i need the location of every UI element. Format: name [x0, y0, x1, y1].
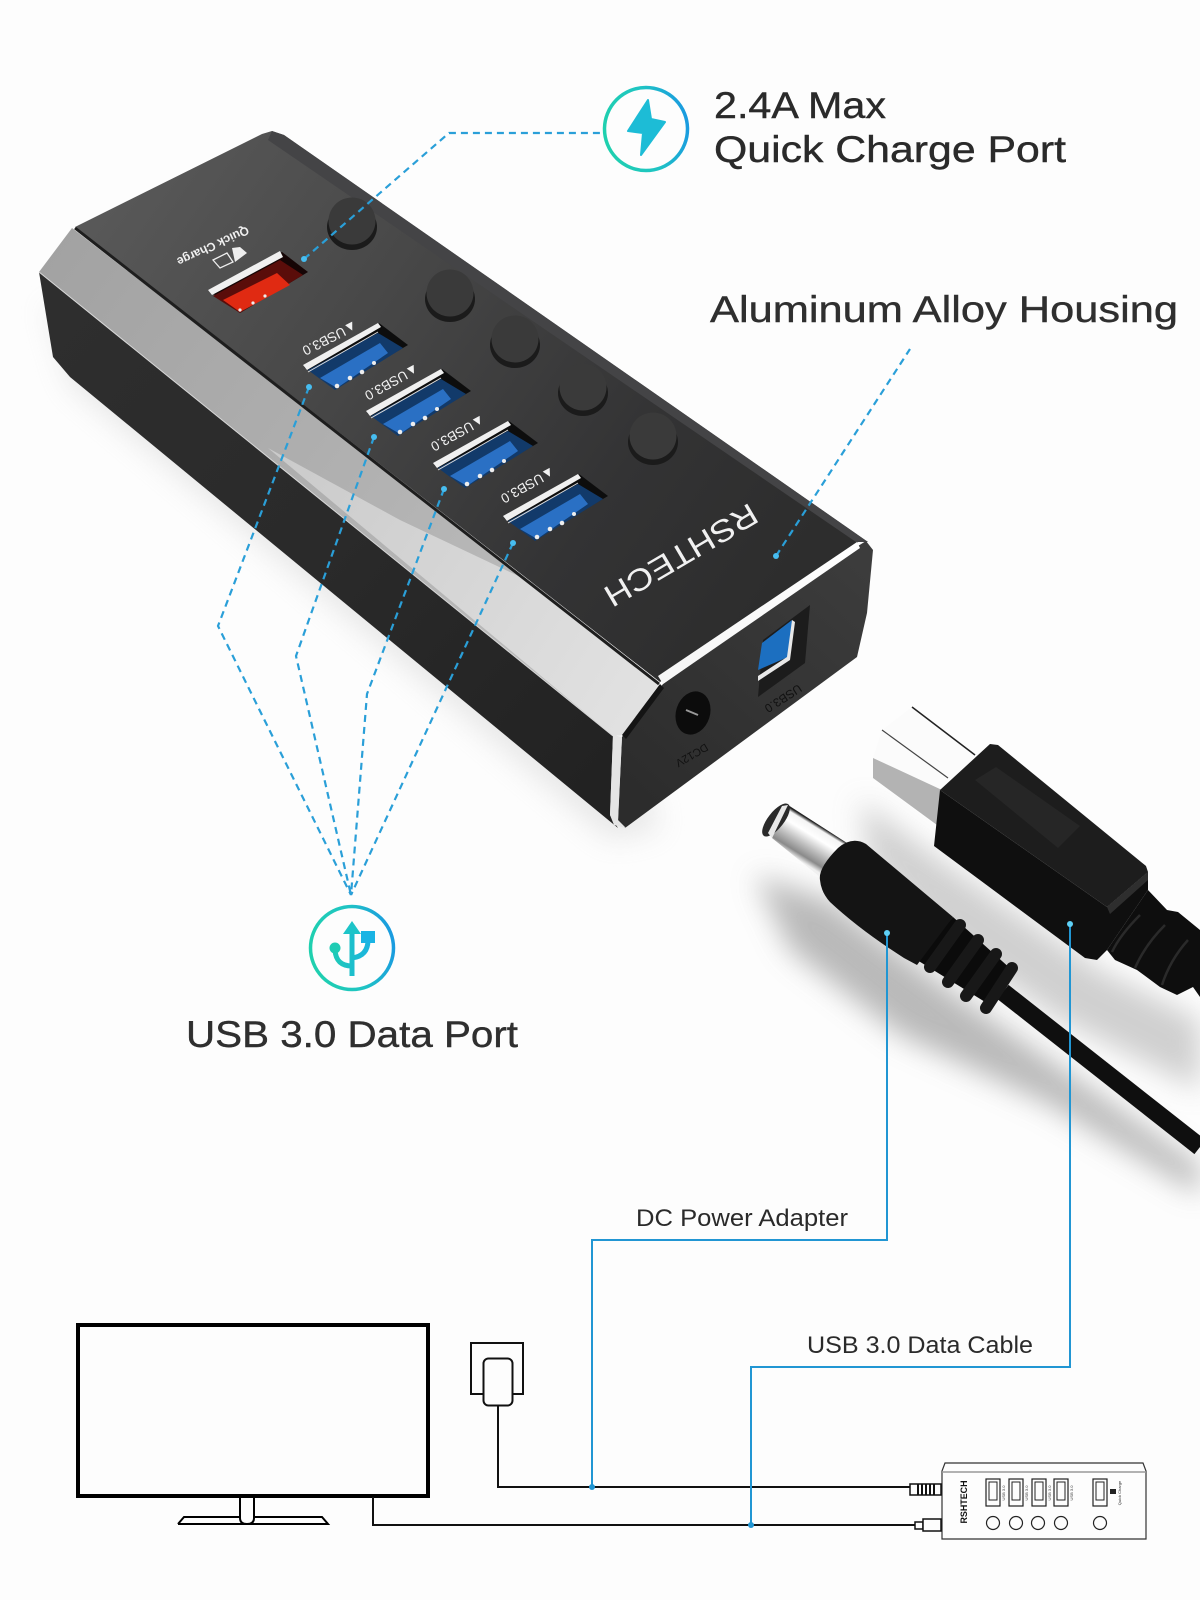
mini hub port labels — [1001, 1480, 1122, 1505]
power buttons — [327, 198, 678, 465]
USB 3.0 port 3 — [433, 421, 538, 488]
hub front face — [610, 541, 873, 828]
data wire from monitor to hub — [373, 1497, 916, 1525]
mini hub port labels: USB 3.0 — [1069, 1485, 1074, 1500]
quick charge dashed leader — [304, 133, 602, 259]
USB-B upstream port: USB3.0 — [762, 681, 804, 716]
DC power cable plug — [757, 799, 1200, 1147]
mini hub outline — [942, 1463, 1146, 1539]
USB-B boot — [934, 744, 1148, 960]
USB 3.0 port 2 — [366, 369, 471, 436]
mini hub charge icon — [1110, 1489, 1116, 1494]
USB3.0 port labels: ▲USB3.0 — [428, 412, 488, 454]
RSHTECH logo: RSHTECH — [598, 496, 764, 614]
mini hub ports — [986, 1479, 1107, 1506]
power wire from adapter to hub — [498, 1406, 912, 1487]
DC cable — [1003, 992, 1200, 1147]
label: DC Power Adapter: DC Power Adapter — [636, 1205, 848, 1232]
hub side face — [39, 272, 618, 828]
mini hub connectors — [910, 1484, 941, 1531]
mini hub port labels: Quick Charge — [1117, 1480, 1122, 1505]
quick charge red port — [208, 251, 308, 313]
USB 3.0 port 1 — [303, 323, 408, 390]
heading: 2.4A Max Quick Charge Port: Quick Charge Port — [714, 129, 1067, 170]
DC boot — [820, 841, 953, 965]
USB ports dashed leaders — [218, 387, 513, 895]
USB-B metal connector — [873, 707, 975, 825]
USB3.0 port labels: ▲USB3.0 — [300, 318, 360, 358]
mini hub buttons — [986, 1516, 1106, 1530]
heading: 2.4A Max Quick Charge Port — [714, 85, 1067, 170]
hub top face — [75, 131, 868, 684]
mini hub port labels: USB 3.0 — [1024, 1485, 1029, 1500]
wall outlet and adapter — [471, 1343, 523, 1406]
heading: 2.4A Max Quick Charge Port: 2.4A Max — [714, 85, 887, 126]
DC strain relief — [917, 917, 1012, 1008]
USB3.0 port labels: ▲USB3.0 — [498, 464, 558, 506]
USB-B strain relief — [1107, 890, 1200, 997]
USB-B upstream port — [758, 605, 810, 716]
leader dots — [301, 256, 779, 559]
power jack — [670, 687, 716, 769]
icon: USB trident circle — [310, 906, 394, 990]
mini hub diagram — [910, 1463, 1146, 1539]
aluminum housing dashed leader — [776, 349, 910, 556]
power jack: DC12V — [673, 741, 710, 769]
USB data cable leader — [748, 921, 1073, 1528]
USB3.0 port labels: ▲USB3.0 — [362, 361, 422, 403]
heading: USB 3.0 Data Port: USB 3.0 Data Port — [186, 1014, 519, 1055]
icon: lightning bolt circle — [604, 88, 688, 170]
USB3.0 port labels — [300, 318, 558, 506]
USB hub product — [39, 131, 873, 828]
cable shadows — [755, 800, 1200, 1195]
hub shadow — [45, 300, 660, 840]
mini hub logo: RSHTECH — [959, 1480, 970, 1524]
USB 3.0 port 4 — [503, 474, 608, 541]
Quick Charge label: Quick Charge — [174, 223, 251, 269]
DC Power Adapter leader — [589, 930, 890, 1490]
hub silver chamfer band — [39, 228, 660, 736]
USB-B cable plug — [873, 707, 1200, 997]
monitor — [78, 1325, 428, 1524]
mini hub port labels: USB 3.0 — [1001, 1485, 1006, 1500]
USB-B boot label recess — [975, 767, 1080, 848]
DC metal barrel — [757, 799, 847, 877]
mini hub port labels: USB 3.0 — [1047, 1485, 1052, 1500]
label: USB 3.0 Data Cable: USB 3.0 Data Cable — [807, 1332, 1033, 1359]
heading: Aluminum Alloy Housing: Aluminum Alloy Housing — [710, 289, 1178, 330]
